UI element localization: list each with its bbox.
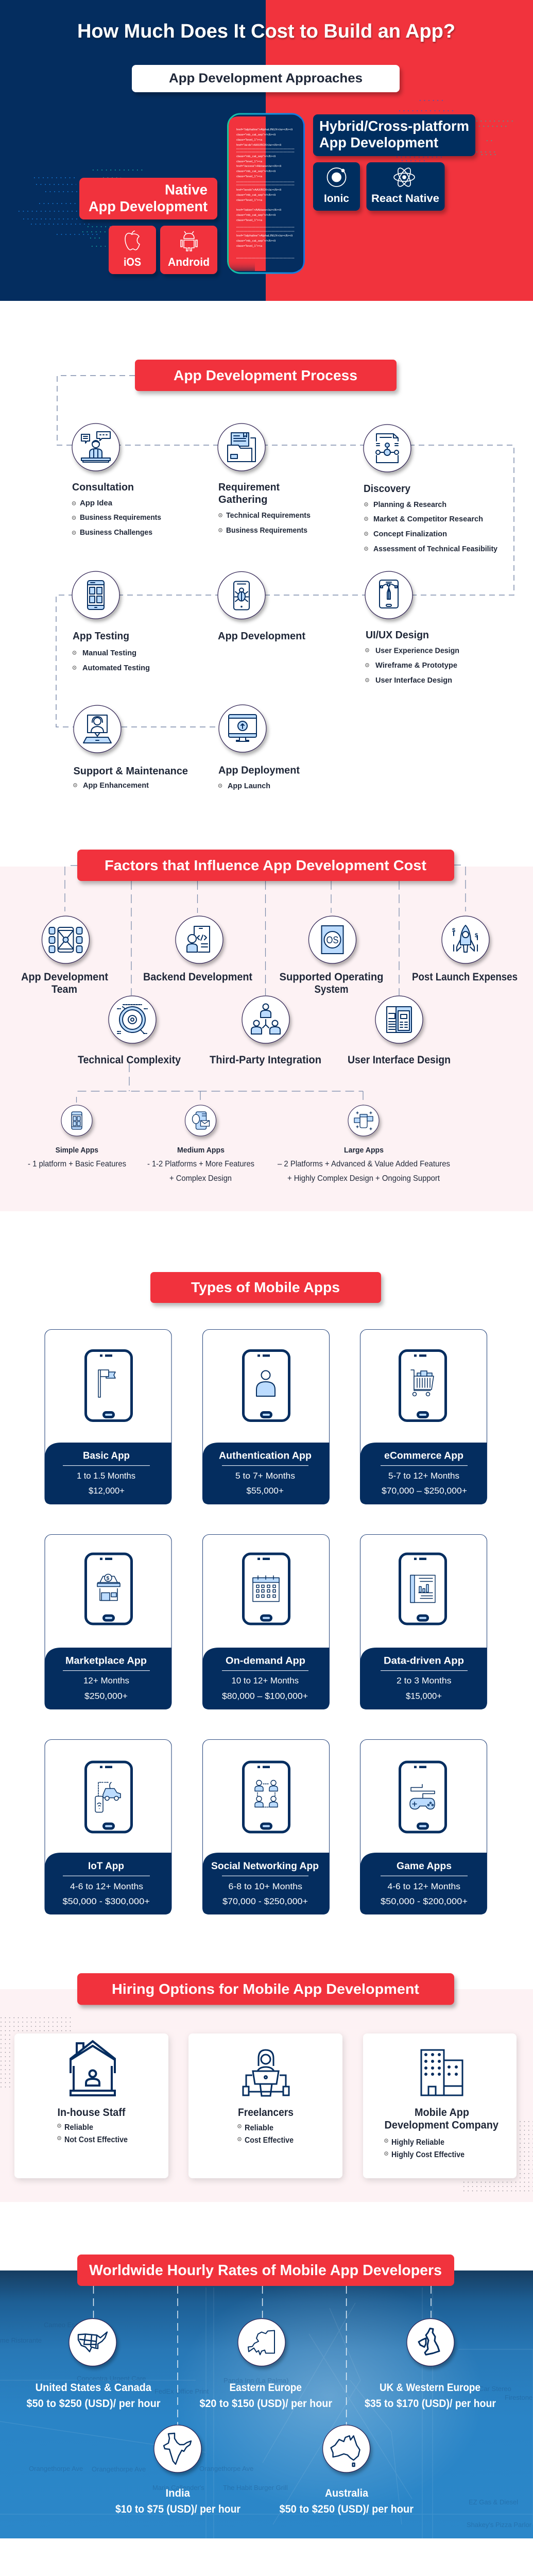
- step: App Development: App Development: [218, 631, 305, 642]
- bullets: [58, 2123, 128, 2144]
- android box: [160, 226, 217, 274]
- map labels: Car Stereo: [479, 2385, 511, 2393]
- card: Marketplace App: [44, 1534, 171, 1709]
- card: Marketplace App: $250,000+: [84, 1691, 128, 1701]
- card: IoT App: $50,000 - $300,000+: [63, 1896, 150, 1906]
- app size: Medium Apps: + Complex Design: [169, 1174, 232, 1183]
- bullets: Highly Cost Effective: [391, 2150, 465, 2159]
- region: UK & Western Europe: $35 to $170 (USD)/ per hour: [365, 2398, 496, 2410]
- factor: Backend Development: [143, 916, 252, 983]
- app size: Large Apps: – 2 Platforms + Advanced & Value Added Features: [278, 1160, 450, 1168]
- react native box: [367, 162, 445, 211]
- icon: australia map: [323, 2425, 370, 2472]
- process connector: [56, 376, 514, 727]
- hybrid box: App Development: [319, 134, 438, 150]
- icon: deployment: [219, 705, 266, 752]
- icon: folder: [218, 423, 265, 471]
- bullet: App Launch: [228, 782, 270, 790]
- code lines: class="level_1"><a: [236, 199, 263, 202]
- bullets: Business Requirements: [80, 513, 161, 522]
- bullets: Cost Effective: [245, 2136, 294, 2145]
- code lines: class="level_1"><a: [236, 245, 263, 248]
- icon: people network on phone: [243, 1762, 289, 1832]
- bullets: User Interface Design: [375, 676, 452, 685]
- card: Authentication App: $55,000+: [246, 1486, 284, 1496]
- icon: [185, 1105, 216, 1136]
- card: Basic App: $12,000+: [89, 1486, 125, 1496]
- card: Authentication App: Authentication App: [219, 1451, 312, 1461]
- bullets: Reliable: [64, 2123, 93, 2132]
- ionic box: Ionic: [324, 193, 349, 205]
- map labels: me Ristorante: [0, 2336, 42, 2344]
- map roads: [0, 2287, 533, 2538]
- code lines: href="/arvdx">AAX/BOX</a></li><li: [236, 189, 281, 192]
- panel: worldwide hourly rates: [0, 2255, 533, 2538]
- bullets: Highly Reliable: [391, 2138, 444, 2147]
- icon: report on phone: [400, 1554, 446, 1624]
- region: Eastern Europe: Eastern Europe: [230, 2382, 302, 2394]
- icon: [242, 996, 289, 1043]
- factor: Technical Complexity: Technical Complexity: [78, 1054, 181, 1066]
- bullets: Wireframe & Prototype: [375, 661, 457, 670]
- icon: usa map: [69, 2318, 116, 2366]
- code lines: href="/access">Akiraos</a></li><li: [236, 165, 281, 168]
- icon: [42, 916, 90, 963]
- icon: [309, 916, 356, 963]
- code lines: class="mb_cat_sep">/</li><li: [236, 133, 276, 137]
- card: On-demand App: 10 to 12+ Months: [232, 1675, 299, 1686]
- native box: App Development: [89, 198, 208, 214]
- particles right: [397, 100, 515, 161]
- icon: $: [452, 927, 455, 934]
- card: Mobile App Development Company: [363, 2033, 517, 2178]
- icon: discovery: [364, 425, 411, 472]
- icon: consultation: [72, 423, 119, 471]
- step: Discovery: Discovery: [364, 483, 411, 495]
- icon: [442, 916, 489, 963]
- icon: freelancer: [243, 2050, 289, 2096]
- bullets: [72, 499, 161, 537]
- heading: [77, 2255, 454, 2286]
- bullets: [219, 511, 311, 535]
- connectors: [94, 2286, 431, 2425]
- app size: Medium Apps: - 1-2 Platforms + More Features: [147, 1160, 254, 1168]
- factor: App Development Team: App Development: [21, 971, 108, 983]
- step: Consultation: [72, 423, 161, 537]
- factor: User Interface Design: User Interface Design: [348, 1054, 451, 1066]
- card: Basic App: 1 to 1.5 Months: [77, 1471, 135, 1481]
- step: Requirement Gathering: Requirement: [218, 482, 280, 493]
- icon: OS: [326, 935, 339, 946]
- factor: Technical Complexity: [78, 996, 181, 1066]
- ionic box: [313, 162, 360, 211]
- card: Marketplace App: Marketplace App: [65, 1656, 147, 1666]
- card: Social Networking App: Social Networking App: [211, 1861, 319, 1872]
- step: UI/UX Design: [365, 571, 459, 685]
- card: eCommerce App: [360, 1329, 487, 1504]
- icon: gamepad on phone: [400, 1762, 446, 1832]
- bullet: App Enhancement: [83, 781, 149, 790]
- bullets: App Idea: [80, 499, 113, 507]
- region: Eastern Europe: $20 to $150 (USD)/ per hour: [200, 2398, 332, 2410]
- bullets: [238, 2124, 294, 2145]
- card: Freelancers: [188, 2033, 342, 2178]
- code lines: class="mb_cat_sep">/</li><li: [236, 155, 276, 158]
- icon: shop on phone: [85, 1554, 132, 1624]
- region: United States & Canada: [27, 2318, 161, 2410]
- app size: Simple Apps: Simple Apps: [56, 1146, 98, 1155]
- bullets: Concept Finalization: [373, 530, 447, 538]
- bullets: Automated Testing: [82, 664, 150, 672]
- bullets: Business Requirements: [226, 526, 307, 535]
- hybrid box: Hybrid/Cross-platform: [319, 118, 469, 134]
- card: On-demand App: $80,000 – $100,000+: [222, 1691, 308, 1701]
- heading: Types of Mobile Apps: [150, 1272, 381, 1303]
- icon: cart on phone: [400, 1351, 446, 1421]
- card: Mobile App Development Company: Development Company: [384, 2120, 498, 2131]
- heading: App Development Process: [135, 360, 397, 391]
- card: eCommerce App: $70,000 – $250,000+: [382, 1486, 467, 1496]
- step: App Development: [218, 572, 305, 642]
- code lines: href="/alphaline">AlphaLINUX</a></li><li: [236, 128, 293, 131]
- map labels: Cameo Escape: [44, 2321, 90, 2329]
- card: Freelancers: Freelancers: [238, 2107, 294, 2119]
- map labels: The Habit Burger Grill: [223, 2484, 288, 2492]
- code lines: class="level_1"><a: [236, 219, 263, 222]
- bullets: User Experience Design: [375, 646, 459, 655]
- icon: bug on phone: [218, 572, 265, 619]
- card: Game Apps: Game Apps: [397, 1861, 452, 1872]
- icon: ionic: [328, 168, 346, 187]
- icon: flag on phone: [85, 1351, 132, 1421]
- approaches pill: [132, 65, 400, 92]
- card: Social Networking App: $70,000 - $250,000+: [222, 1896, 308, 1906]
- region: India: [115, 2425, 240, 2515]
- icon: support: [74, 705, 121, 753]
- heading: Factors that Influence App Development Cost: [105, 857, 426, 873]
- map labels: Shakey's Pizza Parlor: [467, 2521, 532, 2529]
- heading: Hiring Options for Mobile App Development: [112, 1981, 419, 1997]
- android box: Android: [168, 256, 210, 268]
- icon: [176, 916, 223, 963]
- native box: [79, 178, 217, 219]
- card: IoT App: 4-6 to 12+ Months: [70, 1882, 143, 1891]
- region: Australia: Australia: [325, 2487, 368, 2499]
- region: Australia: $50 to $250 (USD)/ per hour: [279, 2503, 414, 2515]
- phone with code: [228, 114, 304, 273]
- panel: hero approaches: [0, 0, 533, 301]
- card: Data-driven App: Data-driven App: [384, 1656, 464, 1666]
- factor: App Development Team: Team: [51, 984, 77, 995]
- icon: calendar on phone: [243, 1554, 289, 1624]
- icon: [61, 1105, 92, 1136]
- particles left: [19, 170, 144, 246]
- step: App Testing: App Testing: [73, 631, 129, 642]
- map labels: EZ Gas & Diesel: [469, 2498, 518, 2506]
- connectors: [65, 865, 466, 1105]
- card: Mobile App Development Company: Mobile App: [415, 2107, 469, 2119]
- bullets: [73, 649, 150, 672]
- factor: Third-Party Integration: Third-Party Integration: [210, 1054, 321, 1066]
- factor: Post Launch Expenses: Post Launch Expenses: [412, 971, 518, 983]
- step: App Deployment: App Deployment: [218, 765, 300, 776]
- region: UK & Western Europe: UK & Western Europe: [380, 2382, 480, 2394]
- icon: europe map: [238, 2318, 285, 2366]
- map labels: FedEx Office Print: [154, 2387, 209, 2395]
- icon: shop on phone: $: [106, 1575, 109, 1582]
- icon: android: [181, 231, 197, 251]
- factor: App Development Team: [21, 916, 108, 995]
- icon: $: [475, 933, 478, 939]
- heading: Worldwide Hourly Rates of Mobile App Developers: [89, 2262, 442, 2279]
- map labels: Orangethorpe Ave: [199, 2465, 253, 2472]
- code lines: class="mb_cat_sep">/</li><li: [236, 170, 276, 173]
- code lines: class="mb_cat_sep">/</li><li: [236, 240, 276, 243]
- bullets: Assessment of Technical Feasibility: [373, 545, 498, 553]
- bullets: Planning & Research: [373, 500, 446, 509]
- bullets: Business Challenges: [80, 528, 152, 537]
- approaches pill: App Development Approaches: [169, 71, 363, 86]
- bullets: Not Cost Effective: [64, 2136, 128, 2144]
- card: On-demand App: On-demand App: [226, 1656, 305, 1666]
- icon: apple: [125, 231, 140, 250]
- step: Discovery: [364, 425, 498, 553]
- card: IoT App: [44, 1739, 171, 1914]
- factor: Supported Operating System: System: [314, 984, 348, 995]
- icon: house: [71, 2041, 115, 2095]
- card: Authentication App: [202, 1329, 330, 1504]
- bullets: Reliable: [245, 2124, 273, 2132]
- step: Support & Maintenance: [73, 705, 188, 790]
- region: United States & Canada: $50 to $250 (USD)/ per hour: [27, 2398, 161, 2410]
- step: Requirement Gathering: [218, 423, 311, 535]
- factor: Third-Party Integration: [210, 996, 321, 1066]
- region: India: India: [166, 2487, 190, 2499]
- map labels: Orangethorpe Ave: [29, 2465, 83, 2472]
- bullets: [366, 646, 459, 685]
- heading: [77, 1973, 454, 2005]
- region: Australia: [279, 2425, 414, 2515]
- step: Consultation: Consultation: [72, 482, 134, 493]
- icon: [375, 996, 423, 1043]
- card: Basic App: Basic App: [83, 1451, 130, 1461]
- icon: user on phone: [243, 1351, 289, 1421]
- card: Authentication App: 5 to 7+ Months: [235, 1471, 295, 1481]
- factor: Post Launch Expenses: [412, 916, 518, 983]
- card: eCommerce App: eCommerce App: [384, 1451, 463, 1461]
- code lines: class="mb_cat_sep">/</li><li: [236, 194, 276, 197]
- step: App Testing: [72, 571, 150, 672]
- card: Game Apps: [360, 1739, 487, 1914]
- region: Eastern Europe: [200, 2318, 332, 2410]
- bullets: Market & Competitor Research: [373, 515, 483, 523]
- ios box: iOS: [124, 256, 141, 268]
- card: On-demand App: [202, 1534, 330, 1709]
- factor: User Interface Design: [348, 996, 451, 1066]
- code lines: class="level_1"><a: [236, 175, 263, 178]
- bullets: Manual Testing: [82, 649, 136, 657]
- factor: Supported Operating System: Supported Operating: [279, 971, 383, 983]
- map labels: [0, 2321, 532, 2529]
- card: Data-driven App: [360, 1534, 487, 1709]
- card: In-house Staff: In-house Staff: [58, 2107, 126, 2119]
- icon: ui ux phone: [365, 571, 412, 619]
- app size: Large Apps: + Highly Complex Design + Ongoing Support: [287, 1174, 440, 1183]
- icon: [348, 1105, 379, 1136]
- step: App Deployment: [218, 705, 300, 790]
- map labels: Firestone: [505, 2394, 532, 2401]
- map labels: Orangethorpe Ave: [92, 2465, 146, 2473]
- icon: connected car on phone: [85, 1762, 132, 1832]
- region: United States & Canada: United States & Canada: [36, 2382, 151, 2394]
- react native box: React Native: [371, 193, 439, 205]
- icon: uk map: [407, 2318, 454, 2366]
- app size: Medium Apps: [147, 1105, 254, 1183]
- card: IoT App: IoT App: [88, 1861, 124, 1872]
- code lines: class="mb_cat_sep">/</li><li: [236, 214, 276, 217]
- code lines: href="/akien">AAkiaos</a></li><li: [236, 209, 281, 212]
- code lines: class="level_1"><a: [236, 160, 263, 163]
- step: Support & Maintenance: Support & Maintenance: [73, 766, 188, 777]
- card: eCommerce App: 5-7 to 12+ Months: [388, 1471, 459, 1481]
- region: India: $10 to $75 (USD)/ per hour: [115, 2503, 240, 2515]
- card: Social Networking App: [202, 1739, 330, 1914]
- map labels: Panda Inn (La Palma): [223, 2377, 288, 2384]
- bullets: [385, 2138, 465, 2159]
- card: Social Networking App: 6-8 to 10+ Months: [229, 1882, 302, 1891]
- card: Marketplace App: 12+ Months: [83, 1675, 129, 1686]
- icon: india map: [154, 2425, 201, 2472]
- code lines: class="level_1"><a: [236, 139, 263, 142]
- icon: react: [394, 166, 415, 188]
- native box: Native: [165, 181, 208, 198]
- panel: hiring options: [0, 1973, 533, 2202]
- factor: Backend Development: Backend Development: [143, 971, 252, 983]
- card: In-house Staff: [14, 2033, 168, 2178]
- icon: [109, 996, 156, 1043]
- heading: Types of Mobile Apps: Types of Mobile Apps: [191, 1279, 340, 1295]
- code lines: [236, 128, 295, 258]
- heading: App Development Process: App Development Process: [174, 367, 357, 383]
- bullets: [365, 500, 498, 553]
- map labels: Concentra Urgent Care: [77, 2375, 146, 2382]
- panel: factors: [0, 850, 533, 1211]
- app size: Simple Apps: - 1 platform + Basic Features: [28, 1160, 126, 1168]
- app size: Large Apps: [278, 1105, 450, 1183]
- title: How Much Does It Cost to Build an App?: [77, 21, 455, 42]
- map labels: Maria Callender's: [152, 2484, 204, 2492]
- card: Game Apps: 4-6 to 12+ Months: [387, 1882, 460, 1891]
- app size: Large Apps: Large Apps: [344, 1146, 384, 1155]
- card: Data-driven App: $15,000+: [406, 1691, 442, 1701]
- app size: Medium Apps: Medium Apps: [177, 1146, 225, 1155]
- factor: Supported Operating System: [279, 916, 383, 995]
- code lines: href="/alphaline">AlphaLINUX</a></li><li: [236, 234, 293, 238]
- heading: [77, 850, 454, 881]
- icon: app testing: [72, 571, 119, 619]
- step: Requirement Gathering: Gathering: [218, 494, 268, 505]
- app size: Simple Apps: [28, 1105, 126, 1168]
- hybrid box: [313, 114, 475, 156]
- icon: building: [421, 2050, 462, 2095]
- region: UK & Western Europe: [365, 2318, 496, 2410]
- step: UI/UX Design: UI/UX Design: [366, 630, 429, 641]
- ios box: [109, 226, 156, 274]
- bullets: Technical Requirements: [226, 511, 311, 520]
- card: Basic App: [44, 1329, 171, 1504]
- card: Data-driven App: 2 to 3 Months: [397, 1675, 451, 1686]
- code lines: href="/ai-dx">AAX/BOX</a></li><li: [236, 144, 281, 147]
- card: Game Apps: $50,000 - $200,000+: [381, 1896, 468, 1906]
